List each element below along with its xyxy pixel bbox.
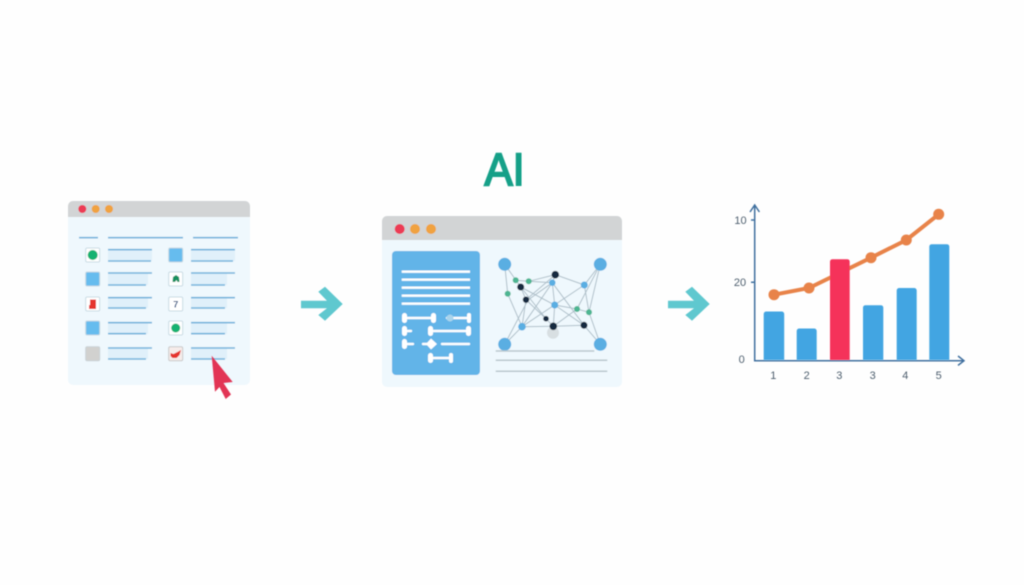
x-axis labels: 4: [902, 370, 908, 382]
icons: right column: 7: [173, 300, 178, 310]
panel: source data window: [68, 201, 250, 385]
network diagram: [498, 258, 607, 351]
x-axis labels: 2: [804, 370, 810, 382]
title: AI: AI: [484, 144, 524, 195]
trend line: [768, 209, 944, 300]
bars: [764, 209, 949, 360]
arrow: AI to chart: [668, 287, 710, 321]
y-axis labels: 20: [734, 277, 746, 289]
arrow: data to AI: [301, 287, 343, 321]
icons: right column: [169, 248, 183, 361]
x-axis labels: 1: [770, 370, 776, 382]
text lines under network: [496, 351, 607, 371]
axes: [750, 205, 964, 365]
x-axis labels: 3: [870, 370, 876, 382]
y-axis labels: 10: [734, 215, 747, 227]
icon: red cursor: [212, 356, 233, 399]
y-axis labels: 0: [739, 354, 745, 366]
x-axis labels: [770, 370, 942, 382]
panel: AI processing window: [382, 216, 622, 387]
x-axis labels: 5: [936, 370, 942, 382]
x-axis labels: 3: [836, 370, 842, 382]
highlighted red bar: [830, 259, 850, 360]
panel: blue form: [392, 251, 480, 375]
icons: left column: [86, 248, 100, 361]
chart: bars and trend line: [734, 205, 964, 382]
y-axis labels: [734, 215, 747, 366]
